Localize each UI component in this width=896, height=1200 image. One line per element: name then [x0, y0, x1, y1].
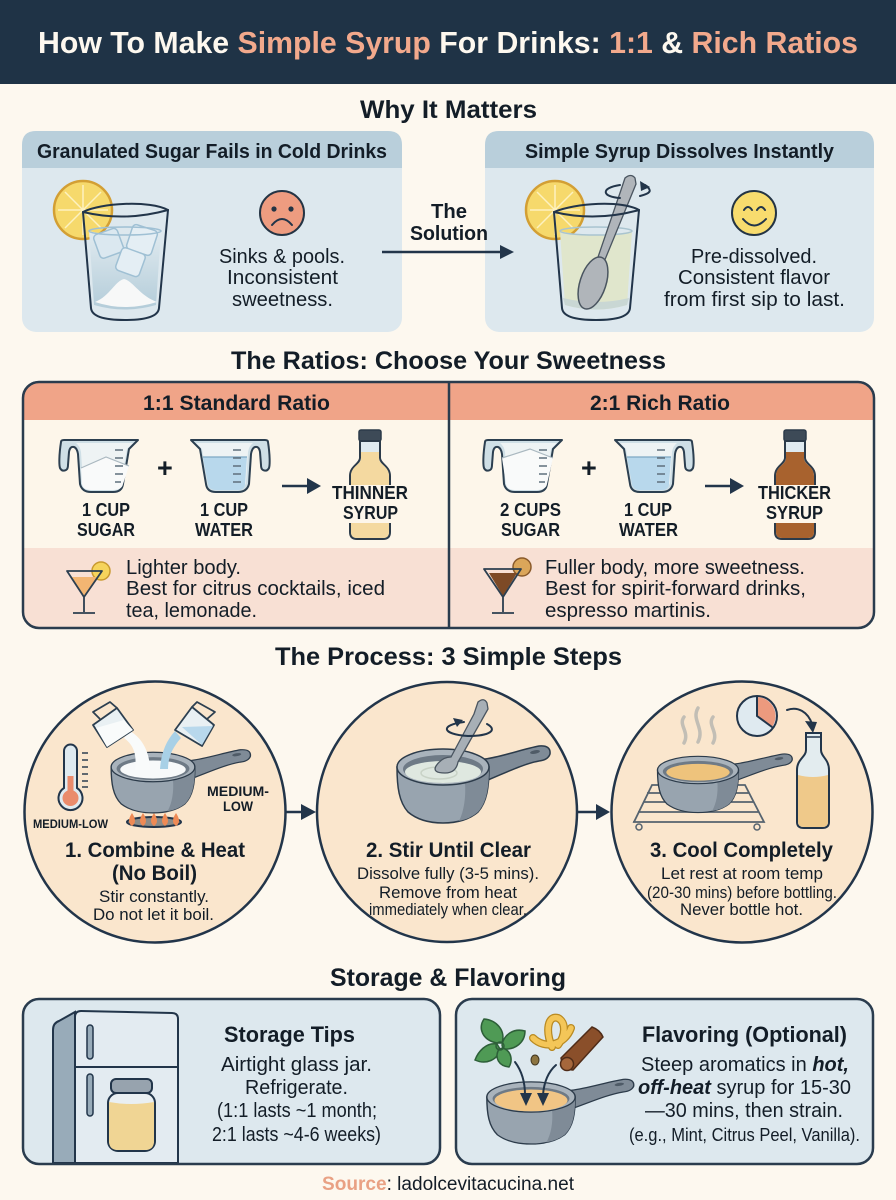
- heading: why it matters: Why It Matters: [360, 96, 537, 124]
- icon: pot with spoon: [397, 700, 550, 823]
- text: rich ratio use: espresso martinis.: [545, 599, 711, 622]
- heading: the ratios: The Ratios: Choose Your Sweetness: [231, 347, 666, 375]
- label: medium-low right: LOW: [223, 798, 254, 814]
- step text 3: (20-30 mins) before bottling.: [647, 884, 837, 902]
- arrow: step 2 to 3: [578, 804, 610, 820]
- step text 2: Remove from heat: [379, 884, 517, 902]
- label: 2 cups sugar: [500, 499, 561, 540]
- icon: thinner syrup bottle: [330, 430, 410, 539]
- text: rich ratio use: Fuller body, more sweetness.: [545, 556, 805, 579]
- icon: fridge with jar: [53, 1011, 178, 1163]
- arrow: step 1 to 2: [286, 804, 316, 820]
- icon: citrus martini: [67, 562, 110, 613]
- title banner: How To Make Simple Syrup For Drinks: 1:1 & Rich Ratios: [38, 25, 858, 60]
- step heading 1: (No Boil): [112, 861, 197, 885]
- panel heading: storage tips: Storage Tips: [224, 1022, 355, 1047]
- text: storage tips: [212, 1053, 381, 1146]
- step text 2: Dissolve fully (3-5 mins).: [357, 865, 539, 883]
- text: syrup benefit: [664, 245, 845, 311]
- label: thicker syrup: [758, 482, 831, 523]
- label: 1 cup sugar: SUGAR: [77, 519, 135, 540]
- icon: sad face: [260, 191, 304, 235]
- text: storage tips: 2:1 lasts ~4-6 weeks): [212, 1123, 381, 1146]
- text: standard ratio use: Lighter body.: [126, 556, 241, 579]
- column heading: 2:1: 2:1 Rich Ratio: [590, 392, 730, 415]
- text: flavoring: off-heat syrup for 15-30: [638, 1076, 851, 1099]
- icon: pot with syrup: [487, 1062, 634, 1144]
- label: thinner syrup: SYRUP: [343, 502, 398, 523]
- label: 2 cups sugar: SUGAR: [501, 519, 560, 540]
- step heading 2: 2. Stir Until Clear: [366, 838, 532, 862]
- icon: espresso martini: [484, 558, 531, 613]
- label: 1 cup water rich: [619, 499, 678, 540]
- step 1: combine and heat: [24, 682, 286, 942]
- step heading 3: 3. Cool Completely: [650, 838, 833, 862]
- text: syrup benefit: Pre-dissolved.: [691, 245, 817, 268]
- panel heading: simple syrup: Simple Syrup Dissolves Instantly: [525, 141, 835, 163]
- text: rich ratio use: [545, 556, 806, 622]
- label: 1 cup sugar: [77, 499, 135, 540]
- label: 1 cup water: 1 CUP: [200, 499, 248, 520]
- arrow: to thinner syrup: [282, 478, 321, 494]
- icon: cup of sugar 1: [59, 440, 138, 492]
- step text 2: [357, 865, 539, 919]
- text: syrup benefit: Consistent flavor: [678, 266, 830, 289]
- text: standard ratio use: Best for citrus cocktails, iced: [126, 577, 385, 600]
- panel: granulated sugar: [22, 131, 402, 332]
- label: medium-low right: MEDIUM-: [207, 783, 269, 799]
- step heading 1: [65, 838, 245, 885]
- text: flavoring: —30 mins, then strain.: [645, 1099, 843, 1122]
- text: sugar problem: [219, 245, 345, 311]
- icon: clock: [737, 696, 777, 736]
- label: medium-low left: MEDIUM-LOW: [33, 817, 109, 831]
- text: storage tips: Airtight glass jar.: [221, 1053, 372, 1076]
- arrow: to thicker syrup: [705, 478, 744, 494]
- icon: thermometer: [58, 745, 88, 810]
- label: 1 cup water rich: WATER: [619, 519, 678, 540]
- panel: storage tips: [23, 999, 440, 1164]
- step heading 1: 1. Combine & Heat: [65, 838, 245, 862]
- icon: pot on burner with pitchers: [93, 702, 250, 827]
- text: rich ratio use: Best for spirit-forward drinks,: [545, 577, 806, 600]
- text: sugar problem: Sinks & pools.: [219, 245, 345, 268]
- arrow: clock to bottle: [787, 709, 817, 733]
- label: thicker syrup: THICKER: [758, 482, 831, 503]
- label: medium-low right: [207, 783, 269, 814]
- label: thicker syrup: SYRUP: [766, 502, 823, 523]
- icon: aromatics: [475, 1018, 603, 1070]
- text: sugar problem: Inconsistent: [227, 266, 338, 289]
- arrow: the solution: The: [431, 201, 467, 223]
- icon: cup of sugar 2: [483, 440, 562, 492]
- icon: steam: [682, 708, 715, 743]
- column heading: 1:1: 1:1 Standard Ratio: [143, 392, 330, 415]
- text: sugar problem: sweetness.: [232, 288, 333, 311]
- step text 1: Do not let it boil.: [93, 906, 214, 924]
- panel: flavoring: [456, 999, 873, 1164]
- text: flavoring: Steep aromatics in hot,: [641, 1053, 849, 1076]
- icon: thicker syrup bottle: [755, 430, 835, 539]
- heading: the process: The Process: 3 Simple Steps: [275, 643, 622, 671]
- panel heading: flavoring: Flavoring (Optional): [642, 1022, 847, 1047]
- text: flavoring: [629, 1053, 860, 1145]
- step 3: cool completely: [612, 682, 872, 942]
- label: 1 cup water: [195, 499, 253, 540]
- step text 2: immediately when clear.: [369, 901, 527, 919]
- source line: Source: ladolcevitacucina.net: [322, 1174, 575, 1195]
- icon: cooling rack and pot: [633, 754, 792, 830]
- panel: ratios table: [23, 382, 874, 628]
- icon: cup of water 2: [615, 440, 694, 492]
- label: 1 cup water: WATER: [195, 519, 253, 540]
- arrow: the solution: [382, 201, 514, 259]
- icon: glass with ice and sugar: [54, 181, 168, 320]
- text: flavoring: (e.g., Mint, Citrus Peel, Vanilla).: [629, 1125, 860, 1145]
- arrow: the solution: Solution: [410, 223, 488, 245]
- step 2: stir until clear: [317, 682, 577, 942]
- text: standard ratio use: tea, lemonade.: [126, 599, 257, 622]
- label: 2 cups sugar: 2 CUPS: [500, 499, 561, 520]
- text: syrup benefit: from first sip to last.: [664, 288, 845, 311]
- text: storage tips: Refrigerate.: [245, 1076, 348, 1099]
- text: standard ratio use: [126, 556, 385, 622]
- step text 3: [647, 865, 837, 919]
- panel: simple syrup: [485, 131, 874, 332]
- step text 3: Let rest at room temp: [661, 865, 823, 883]
- icon: happy face: [732, 191, 776, 235]
- label: 1 cup sugar: 1 CUP: [82, 499, 130, 520]
- label: thinner syrup: THINNER: [332, 482, 408, 503]
- title banner: [0, 0, 896, 84]
- step text 1: [93, 888, 214, 924]
- text: storage tips: (1:1 lasts ~1 month;: [217, 1099, 377, 1122]
- step text 3: Never bottle hot.: [680, 901, 803, 919]
- icon: filled bottle: [797, 733, 829, 828]
- heading: storage and flavoring: Storage & Flavoring: [330, 964, 566, 992]
- panel heading: granulated: Granulated Sugar Fails in Cold Drinks: [37, 141, 387, 163]
- label: 1 cup water rich: 1 CUP: [624, 499, 672, 520]
- icon: plus 2: +: [581, 453, 597, 483]
- label: thinner syrup: [332, 482, 408, 523]
- icon: cup of water 1: [191, 440, 270, 492]
- icon: plus 1: +: [157, 453, 173, 483]
- step text 1: Stir constantly.: [99, 888, 209, 906]
- icon: glass with spoon: [526, 176, 650, 320]
